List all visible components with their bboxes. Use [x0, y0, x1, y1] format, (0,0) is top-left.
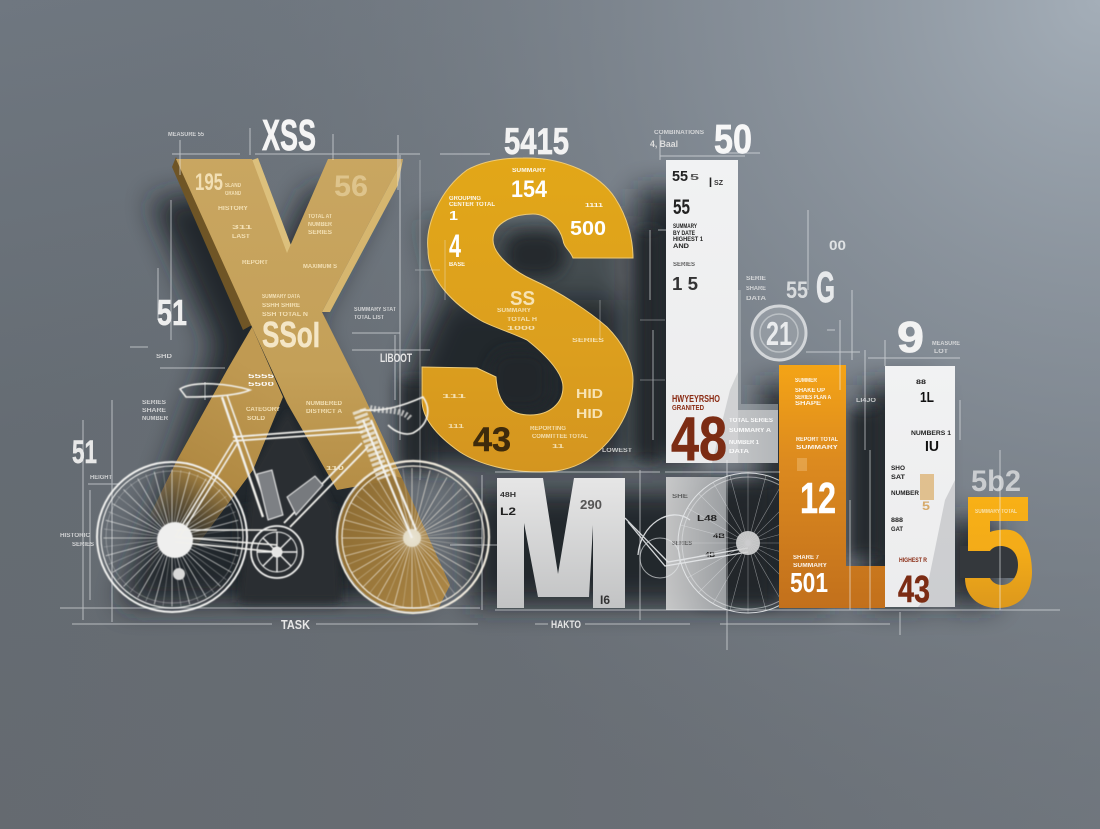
side labels and numbers: DATA — [746, 296, 767, 302]
side labels and numbers: SERIE — [746, 276, 766, 282]
X micro text: SUMMARY DATA — [262, 294, 301, 300]
letter S: 1000 — [507, 326, 536, 332]
white letter L: HIGHEST 1 — [673, 237, 704, 243]
orange letter L: SHARE 7 — [793, 555, 820, 561]
orange letter L: SHAKE UP — [795, 388, 825, 394]
bicycle — [95, 384, 491, 617]
X micro text: SSH TOTAL N — [262, 312, 308, 318]
side labels and numbers: HEIGHT — [90, 475, 112, 481]
side labels and numbers — [60, 130, 1021, 548]
translucent panel behind second wheel: 4B — [713, 534, 726, 540]
letter S — [422, 158, 633, 472]
letter S: SUMMARY — [497, 308, 531, 314]
orange letter L: 12 — [800, 474, 836, 523]
translucent panel behind second wheel: L48 — [697, 514, 718, 523]
white letter L: SZ — [714, 180, 724, 187]
white letter L: 55 — [673, 196, 690, 219]
white bar: NUMBERS 1 — [911, 431, 952, 437]
X micro text: 5500 — [248, 382, 275, 388]
X micro text: SLAND — [225, 183, 242, 189]
letter S: 111 — [442, 394, 468, 400]
X micro text: TOTAL AT — [308, 214, 332, 220]
translucent panel behind second wheel — [666, 477, 726, 610]
letter X — [150, 157, 403, 555]
white bar: 5 — [922, 499, 930, 513]
percentage circle 21 — [752, 306, 806, 360]
blueprint lines — [60, 128, 1060, 650]
letter S: 154 — [511, 176, 548, 203]
letter S: COMMITTEE TOTAL — [532, 434, 588, 440]
side labels and numbers: TOTAL LIST — [354, 315, 384, 321]
label 5415: 5415 — [504, 121, 569, 162]
white bar: SAT — [891, 475, 905, 481]
side labels and numbers: SHARE — [142, 408, 166, 414]
side labels and numbers: SERIES — [72, 542, 94, 548]
dark area under the X crotch — [240, 410, 340, 600]
letter S: 4 — [449, 228, 461, 264]
translucent panel behind second wheel: SHE — [672, 494, 688, 500]
X micro text: SSHH SHIRE — [262, 303, 300, 309]
side labels and numbers: 4, Baal — [650, 139, 678, 149]
letter S: TOTAL H — [507, 317, 537, 323]
white letter L: I — [709, 174, 712, 190]
white bar: 88 — [916, 380, 927, 386]
axis captions: TASK — [281, 617, 311, 632]
orange letter L: SERIES PLAN A — [795, 395, 832, 401]
letter M — [497, 478, 625, 608]
orange letter L: REPORT TOTAL — [796, 437, 838, 443]
X micro text: SSoI — [262, 314, 320, 355]
X micro text: 195 — [195, 169, 223, 196]
X micro text: SOLD — [247, 416, 266, 422]
frame — [175, 384, 428, 552]
X micro text: CATEGORY — [246, 407, 280, 413]
top labels — [262, 111, 752, 162]
white letter L: 5 — [690, 173, 700, 182]
side labels and numbers: COMBINATIONS — [654, 130, 704, 136]
orange letter L: SUMMARY — [793, 563, 827, 569]
faded wheel right of M — [625, 473, 818, 613]
orange letter L: SHAPE — [795, 401, 821, 407]
translucent panel behind second wheel: 4B — [705, 552, 715, 559]
white letter L: DATA — [729, 449, 750, 455]
white letter L — [666, 160, 778, 474]
crank — [251, 526, 303, 578]
yellow number 5: SUMMARY TOTAL — [975, 509, 1017, 515]
side labels and numbers: HISTORIC — [60, 533, 91, 539]
letter S: 43 — [473, 421, 511, 459]
X micro text: 110 — [326, 466, 345, 472]
orange letter L: 501 — [790, 567, 828, 598]
X micro text: REPORT — [242, 260, 268, 266]
label XSS: XSS — [262, 111, 316, 160]
letter S: HID — [576, 386, 603, 401]
side labels and numbers: 55 — [786, 277, 808, 304]
letter S: 1 — [449, 208, 458, 223]
letter M: 48H — [500, 492, 516, 499]
white letter L: BY DATE — [673, 231, 695, 237]
white letter L: NUMBER 1 — [729, 440, 760, 446]
white letter L: 48 — [671, 405, 727, 474]
white letter L: 55 — [672, 168, 688, 185]
X micro text — [195, 169, 368, 472]
side labels and numbers: LI4JO — [856, 398, 876, 404]
translucent panel behind second wheel: SERIES — [672, 541, 692, 547]
front wheel — [333, 459, 491, 617]
orange letter L: SUMMER — [795, 378, 818, 384]
dark gaps between letters — [240, 230, 880, 604]
label 50: 50 — [714, 116, 752, 162]
white bar: 888 — [891, 518, 904, 524]
letter S: SUMMARY — [512, 168, 546, 174]
percentage circle 21: 21 — [766, 315, 792, 352]
white bar — [885, 366, 955, 611]
front wheel gold fill — [338, 472, 450, 612]
white letter L: TOTAL SERIES — [729, 418, 773, 424]
X micro text: 5555 — [248, 374, 275, 380]
side labels and numbers: 51 — [72, 434, 97, 470]
orange letter L — [779, 365, 885, 608]
letter S: HID — [576, 406, 603, 421]
side labels and numbers: SHD — [156, 354, 173, 360]
rear wheel — [95, 461, 249, 615]
side labels and numbers: SHARE — [746, 286, 766, 292]
X micro text: 56 — [334, 170, 368, 203]
white bar: SHO — [891, 466, 905, 472]
white bar: 43 — [898, 569, 930, 611]
X micro text: MAXIMUM S — [303, 264, 337, 270]
white letter L: 1 5 — [672, 274, 698, 294]
X micro text: NUMBERED — [306, 401, 343, 407]
side labels and numbers: 00 — [829, 237, 846, 253]
side labels and numbers: NUMBER — [142, 416, 169, 422]
side labels and numbers: LIBOOT — [380, 351, 412, 365]
side labels and numbers: 9 — [897, 313, 924, 362]
drop shadows behind letters — [120, 190, 995, 605]
side labels and numbers: MEASURE — [932, 341, 960, 347]
white letter L: HWYEYRSHO — [672, 394, 720, 405]
white letter L: SUMMARY A — [729, 428, 772, 434]
X micro text: LAST — [232, 234, 250, 240]
white bar: IU — [925, 438, 939, 455]
X micro text: NUMBER — [308, 222, 333, 228]
letter S: BASE — [449, 262, 465, 268]
letter S: SS — [510, 288, 535, 310]
letter S: GROUPING — [449, 196, 481, 202]
white bar: 1L — [920, 389, 934, 406]
X micro text: GRAND — [225, 191, 241, 197]
letter S: 111 — [448, 424, 465, 430]
yellow number 5 — [960, 497, 1032, 608]
letter S: SERIES — [572, 338, 604, 344]
side labels and numbers: 5b2 — [971, 465, 1021, 498]
letter S: CENTER TOTAL — [449, 202, 495, 208]
letter S: REPORTING — [530, 426, 566, 432]
side labels and numbers: LOT — [934, 349, 948, 355]
side labels and numbers: LOWEST — [602, 448, 632, 454]
bottles — [257, 470, 323, 520]
X micro text: 311 — [232, 225, 253, 231]
side labels and numbers: SERIES — [142, 400, 166, 406]
side labels and numbers: G — [816, 263, 835, 312]
side labels and numbers: 51 — [157, 292, 187, 333]
orange letter L: SUMMARY — [796, 445, 838, 451]
white letter L: SUMMARY — [673, 224, 697, 230]
white bar: NUMBER — [891, 491, 920, 497]
letter S: 500 — [570, 218, 606, 240]
X micro text: HISTORY — [218, 206, 248, 212]
side labels and numbers: MEASURE 55 — [168, 132, 205, 138]
side labels and numbers: SUMMARY STAT — [354, 307, 396, 313]
X lower left leg — [150, 327, 283, 555]
white letter L: SERIES — [673, 262, 695, 268]
letter S: 11 — [552, 444, 565, 450]
axis captions: HAKTO — [551, 619, 581, 631]
white letter L: GRANITED — [672, 405, 704, 412]
white letter L: AND — [673, 244, 690, 250]
white bar: GAT — [891, 527, 903, 533]
axis captions — [281, 617, 581, 632]
white bar: HIGHEST R — [899, 558, 928, 564]
letter S: 1111 — [585, 203, 604, 209]
letter M: L2 — [500, 506, 516, 518]
X micro text: SERIES — [308, 230, 332, 236]
letter M: 290 — [580, 497, 602, 512]
letter M: I6 — [600, 593, 610, 607]
X micro text: DISTRICT A — [306, 409, 343, 415]
